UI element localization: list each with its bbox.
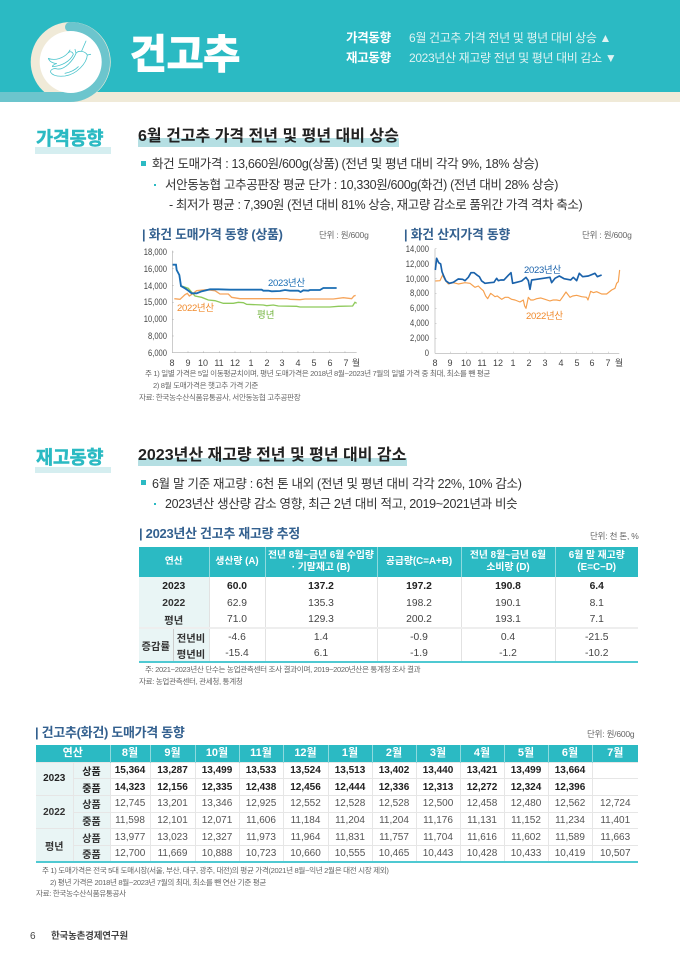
table: wholesale price: 12,336 <box>379 782 409 793</box>
table: wholesale price: 12,324 <box>511 782 541 793</box>
line chart: wholesale price: 7 <box>343 358 349 368</box>
table: wholesale price: 11,704 <box>423 832 453 843</box>
table: wholesale price: 13,499 <box>202 765 232 776</box>
table: wholesale price: 11,602 <box>511 832 541 843</box>
table: wholesale price: 12,925 <box>246 798 276 809</box>
table: wholesale price: 10,419 <box>555 848 585 859</box>
table: stock estimate: 6월 말 재고량 <box>569 550 625 561</box>
table: stock estimate: 소비량 (D) <box>486 562 530 573</box>
table: wholesale price: 13,977 <box>115 832 145 843</box>
table: stock estimate: 6.4 <box>590 581 604 592</box>
table: stock estimate: 190.1 <box>495 598 521 609</box>
table: wholesale price: 11월 <box>250 747 272 759</box>
unit: 단위: 천 톤, % <box>590 531 639 541</box>
chart notes: 2) 8월 도매가격은 햇고추 가격 기준 <box>153 381 258 390</box>
table: wholesale price: 12,071 <box>202 815 232 826</box>
table: wholesale price: 11,606 <box>246 815 276 826</box>
table: stock estimate: 60.0 <box>227 581 247 592</box>
table: stock estimate: 8.1 <box>590 598 604 609</box>
table: stock estimate: -0.9 <box>410 632 428 643</box>
table: wholesale price: 1월 <box>342 747 358 759</box>
table: wholesale price: 12,480 <box>511 798 541 809</box>
header summary: 2023년산 재고량 전년 및 평년 대비 감소 ▼ <box>409 51 616 65</box>
unit: 단위 : 원/600g <box>582 230 632 240</box>
table notes <box>36 866 389 898</box>
line chart: producer price <box>406 243 623 368</box>
table: stock estimate: 1.4 <box>314 632 328 643</box>
table: wholesale price: 13,533 <box>246 765 276 776</box>
table: wholesale price: 12월 <box>294 747 317 759</box>
table: wholesale price: 12,101 <box>157 815 188 826</box>
stock bullets: 6월 말 기준 재고량 : 6천 톤 내외 (전년 및 평년 대비 각각 22%, 10% 감소) <box>152 477 522 491</box>
table: wholesale price: 11,131 <box>467 815 497 826</box>
table notes: 2) 평년 가격은 2018년 8월~2023년 7월의 최대, 최소를 뺀 연산 기준 평균 <box>50 878 266 887</box>
price bullets: 서안동농협 고추공판장 평균 단가 : 10,330원/600g(화건) (전년 대비 28% 상승) <box>165 178 558 192</box>
unit: 단위 : 원/600g <box>319 230 369 240</box>
table: wholesale price: 10,888 <box>202 848 232 859</box>
table: wholesale price: 12,327 <box>202 832 232 843</box>
table: wholesale price: 10,555 <box>335 848 365 859</box>
table: wholesale price: 11,669 <box>158 848 187 859</box>
table: stock estimate: 생산량 (A) <box>215 556 259 567</box>
line chart: wholesale price: 월 <box>352 357 360 368</box>
table: wholesale price: 10,723 <box>246 848 276 859</box>
table: stock estimate: 2023 <box>162 581 185 592</box>
heading: price: 6월 건고추 가격 전년 및 평년 대비 상승 <box>138 128 399 145</box>
table: wholesale price: 평년 <box>45 842 63 853</box>
line chart: wholesale price: 8 <box>169 358 175 368</box>
header summary: 6월 건고추 가격 전년 및 평년 대비 상승 ▲ <box>409 31 611 45</box>
table: wholesale price: 11,234 <box>555 815 585 826</box>
table notes: 자료: 한국농수산식품유통공사 <box>36 889 126 898</box>
table: wholesale price: 10,433 <box>511 848 541 859</box>
line chart: producer price: 4 <box>558 358 564 368</box>
line chart: producer price: 9 <box>447 358 453 368</box>
table notes <box>139 665 420 686</box>
table: wholesale price: 2022 <box>43 807 65 818</box>
table: wholesale price: 13,287 <box>157 765 188 776</box>
line chart: wholesale price: 2022년산 <box>177 303 214 314</box>
line chart: wholesale price: 2 <box>264 358 270 368</box>
table: wholesale price: 13,421 <box>467 765 497 776</box>
table: wholesale price: 15,364 <box>115 765 145 776</box>
table: wholesale price: 8월 <box>122 747 138 759</box>
table: stock estimate: -4.6 <box>228 632 246 643</box>
table: wholesale price: 13,346 <box>202 798 232 809</box>
line chart: wholesale price: 3 <box>279 358 285 368</box>
table: wholesale price: 2023 <box>43 773 65 784</box>
table: wholesale price: 10,465 <box>379 848 409 859</box>
page number: 6 <box>30 931 36 942</box>
stock bullets: 2023년산 생산량 감소 영향, 최근 2년 대비 적고, 2019~2021년과 비슷 <box>165 497 517 511</box>
table: wholesale price: 12,528 <box>379 798 409 809</box>
line chart: wholesale price <box>144 246 360 368</box>
publisher: 한국농촌경제연구원 <box>51 931 128 942</box>
line chart: wholesale price: 16,000 <box>144 263 167 274</box>
chart title: producer: | 화건 산지가격 동향 <box>404 227 510 242</box>
table: wholesale price: 11,663 <box>600 832 630 843</box>
line chart: wholesale price: 6 <box>327 358 333 368</box>
line chart: wholesale price: 5 <box>311 358 317 368</box>
table: wholesale price: 중품 <box>82 850 101 861</box>
line chart: producer price: 2023년산 <box>524 265 561 276</box>
heading: stock: 2023년산 재고량 전년 및 평년 대비 감소 <box>138 447 406 464</box>
section label: stock trend: 재고동향 <box>36 447 103 468</box>
section label: price trend: 가격동향 <box>36 128 103 149</box>
table: wholesale price: 11,973 <box>246 832 276 843</box>
line chart: wholesale price: 평년 <box>257 310 274 321</box>
table: stock estimate: 135.3 <box>308 598 334 609</box>
chart notes: 자료: 한국농수산식품유통공사, 서안동농협 고추공판장 <box>139 393 300 402</box>
table: wholesale price: 11,204 <box>379 815 409 826</box>
line chart: wholesale price: 4 <box>295 358 301 368</box>
table: stock estimate: 7.1 <box>590 614 604 625</box>
table: stock estimate: 0.4 <box>501 632 515 643</box>
table: wholesale price: 12,272 <box>467 782 497 793</box>
table: wholesale price: 12,500 <box>423 798 453 809</box>
line chart: producer price: 12 <box>493 358 503 368</box>
line chart: producer price: 월 <box>615 357 623 368</box>
line chart: wholesale price: 9 <box>185 358 191 368</box>
table: wholesale price: 10,428 <box>467 848 497 859</box>
table: wholesale price: 13,023 <box>157 832 188 843</box>
table title: stock estimate: | 2023년산 건고추 재고량 추정 <box>139 526 300 541</box>
table: wholesale price: 11,401 <box>600 815 630 826</box>
table: wholesale price: 중품 <box>82 784 101 795</box>
table: wholesale price: 11,184 <box>291 815 320 826</box>
line chart: wholesale price: 1 <box>248 358 254 368</box>
table: wholesale price: 13,524 <box>290 765 321 776</box>
line chart: wholesale price: 6,000 <box>148 347 167 358</box>
table: wholesale price: 12,724 <box>600 798 631 809</box>
table: wholesale price: 상품 <box>82 834 101 845</box>
table: wholesale price: 12,156 <box>157 782 188 793</box>
line chart: producer price: 1 <box>510 358 516 368</box>
line chart: producer price: 4,000 <box>410 317 429 328</box>
table: stock estimate: 연산 <box>165 556 183 567</box>
table notes: 주: 2021~2023년산 단수는 농업관측센터 조사 결과이며, 2019~2020년산은 통계청 조사 결과 <box>145 665 420 674</box>
title: 건고추 <box>130 33 240 77</box>
line chart: producer price: 8,000 <box>410 287 429 298</box>
chart notes: 주 1) 일별 가격은 5일 이동평균치이며, 평년 도매가격은 2018년 8월~2023년 7월의 일별 가격 중 최대, 최소를 뺀 평균 <box>145 369 490 378</box>
table: wholesale price: 상품 <box>82 767 101 778</box>
unit: 단위: 원/600g <box>587 729 634 739</box>
table: stock estimate: 6.1 <box>314 648 328 659</box>
table: stock estimate: 197.2 <box>406 581 432 592</box>
line chart: producer price: 12,000 <box>406 258 429 269</box>
table: wholesale price: 11,176 <box>423 815 453 826</box>
table: stock estimate: 193.1 <box>495 614 521 625</box>
table: wholesale price: 13,201 <box>157 798 188 809</box>
table: wholesale price: 10,660 <box>290 848 321 859</box>
table: stock estimate: 190.8 <box>495 581 521 592</box>
line chart: wholesale price: 18,000 <box>144 246 167 257</box>
table: stock estimate: 공급량(C=A+B) <box>386 556 452 567</box>
header summary: 가격동향 <box>346 31 391 45</box>
table: stock estimate: -10.2 <box>585 648 608 659</box>
line chart: wholesale price: 15,000 <box>144 296 167 307</box>
table: stock estimate: 137.2 <box>308 581 334 592</box>
line chart: producer price: 3 <box>542 358 548 368</box>
table: wholesale price: 12,745 <box>115 798 145 809</box>
table: wholesale price: 12,700 <box>115 848 145 859</box>
header summary <box>346 31 616 65</box>
line chart: wholesale price: 10 <box>198 358 208 368</box>
table: wholesale price: 연산 <box>63 747 83 759</box>
table: wholesale price: 11,616 <box>467 832 497 843</box>
table: stock estimate: · 기말재고 (B) <box>292 562 350 573</box>
table: wholesale price: 13,440 <box>423 765 453 776</box>
line chart: producer price: 2 <box>526 358 532 368</box>
line chart: wholesale price: 12 <box>230 358 240 368</box>
table: wholesale price: 11,831 <box>335 832 365 843</box>
table: stock estimate: 전년비 <box>177 634 205 645</box>
table: wholesale price: 10,507 <box>600 848 631 859</box>
line chart: producer price: 10 <box>461 358 471 368</box>
table: wholesale price: 12,456 <box>290 782 321 793</box>
table: stock estimate: 200.2 <box>406 614 432 625</box>
table: wholesale price: 12,552 <box>290 798 321 809</box>
line chart: producer price: 8 <box>432 358 438 368</box>
table: wholesale price: 12,438 <box>246 782 276 793</box>
table notes: 주 1) 도매가격은 전국 5대 도매시장(서울, 부산, 대구, 광주, 대전)의 평균 가격(2021년 8월~익년 2월은 대전 시장 제외) <box>42 866 389 875</box>
line chart: producer price: 0 <box>425 347 429 358</box>
table: stock estimate: 62.9 <box>227 598 247 609</box>
table: wholesale price: 11,589 <box>555 832 585 843</box>
line chart: wholesale price: 2023년산 <box>268 278 305 289</box>
table: wholesale price: 11,598 <box>115 815 145 826</box>
line chart: wholesale price: 8,000 <box>148 330 167 341</box>
table: stock estimate: 2022 <box>162 598 185 609</box>
table: wholesale price: 4월 <box>474 747 490 759</box>
line chart: producer price: 2,000 <box>410 332 429 343</box>
line chart: producer price: 5 <box>574 358 580 368</box>
line chart: wholesale price: 11 <box>214 358 224 368</box>
table: stock estimate: -1.2 <box>499 648 517 659</box>
table: wholesale price: 13,513 <box>335 765 365 776</box>
table: stock estimate <box>139 547 638 663</box>
table: wholesale price: 6월 <box>562 747 578 759</box>
line chart: producer price: 7 <box>605 358 611 368</box>
table: wholesale price: 13,499 <box>511 765 541 776</box>
table: wholesale price: 중품 <box>82 817 101 828</box>
table title: wholesale price: | 건고추(화건) 도매가격 동향 <box>35 725 185 740</box>
table: wholesale price: 11,152 <box>511 815 541 826</box>
table: stock estimate: 전년 8월~금년 6월 수입량 <box>268 550 374 561</box>
line chart: producer price: 6,000 <box>410 302 429 313</box>
table: wholesale price: 13,664 <box>555 765 585 776</box>
header band <box>0 0 680 102</box>
table: wholesale price: 12,458 <box>467 798 497 809</box>
table: wholesale price: 13,402 <box>379 765 409 776</box>
table: wholesale price: 11,204 <box>335 815 365 826</box>
table: stock estimate: -21.5 <box>585 632 608 643</box>
table: wholesale price: 12,562 <box>555 798 585 809</box>
table: wholesale price: 12,396 <box>555 782 585 793</box>
table: wholesale price: 10,443 <box>423 848 453 859</box>
table: wholesale price: 12,335 <box>202 782 232 793</box>
line chart: producer price: 14,000 <box>406 243 429 254</box>
table: wholesale price: 5월 <box>518 747 534 759</box>
price bullets: 화건 도매가격 : 13,660원/600g(상품) (전년 및 평년 대비 각각 9%, 18% 상승) <box>152 157 538 171</box>
table: stock estimate: 증감률 <box>142 642 170 653</box>
table: wholesale price: 11,964 <box>291 832 320 843</box>
table: stock estimate: 198.2 <box>406 598 432 609</box>
table: wholesale price: 12,444 <box>335 782 365 793</box>
line chart: producer price: 6 <box>589 358 595 368</box>
chart notes <box>139 369 490 402</box>
table: wholesale price: 9월 <box>164 747 181 759</box>
stock bullets <box>141 477 522 511</box>
table: wholesale price: 12,528 <box>335 798 365 809</box>
chart title: wholesale: | 화건 도매가격 동향 (상품) <box>142 227 283 242</box>
table: wholesale price: 14,323 <box>115 782 145 793</box>
table: wholesale price: 7월 <box>607 747 623 759</box>
table: wholesale price: 2월 <box>386 747 402 759</box>
line chart: producer price: 11 <box>477 358 487 368</box>
table: wholesale price: 상품 <box>82 800 101 811</box>
header summary: 재고동향 <box>346 51 391 65</box>
table: stock estimate: 평년비 <box>177 650 205 661</box>
line chart: wholesale price: 14,000 <box>144 280 167 291</box>
table: stock estimate: 전년 8월~금년 6월 <box>470 550 546 561</box>
icon: pepper emblem <box>0 22 111 102</box>
table: wholesale price: 10월 <box>206 747 228 759</box>
table: wholesale price <box>36 745 638 863</box>
table: wholesale price: 12,313 <box>423 782 453 793</box>
price bullets <box>141 157 582 212</box>
line chart: wholesale price: 10,000 <box>144 313 167 324</box>
table: wholesale price: 11,757 <box>379 832 409 843</box>
table: stock estimate: 평년 <box>164 616 183 627</box>
table: stock estimate: -1.9 <box>410 648 428 659</box>
table notes: 자료: 농업관측센터, 관세청, 통계청 <box>139 677 242 686</box>
table: wholesale price: 3월 <box>430 747 446 759</box>
line chart: producer price: 10,000 <box>406 273 429 284</box>
table: stock estimate: -15.4 <box>225 648 249 659</box>
table: stock estimate: (E=C−D) <box>577 562 616 573</box>
table: stock estimate: 129.3 <box>308 614 334 625</box>
table: stock estimate: 71.0 <box>227 614 247 625</box>
price bullets: - 최저가 평균 : 7,390원 (전년 대비 81% 상승, 재고량 감소로 품위간 가격 격차 축소) <box>169 198 582 212</box>
line chart: producer price: 2022년산 <box>526 311 563 322</box>
